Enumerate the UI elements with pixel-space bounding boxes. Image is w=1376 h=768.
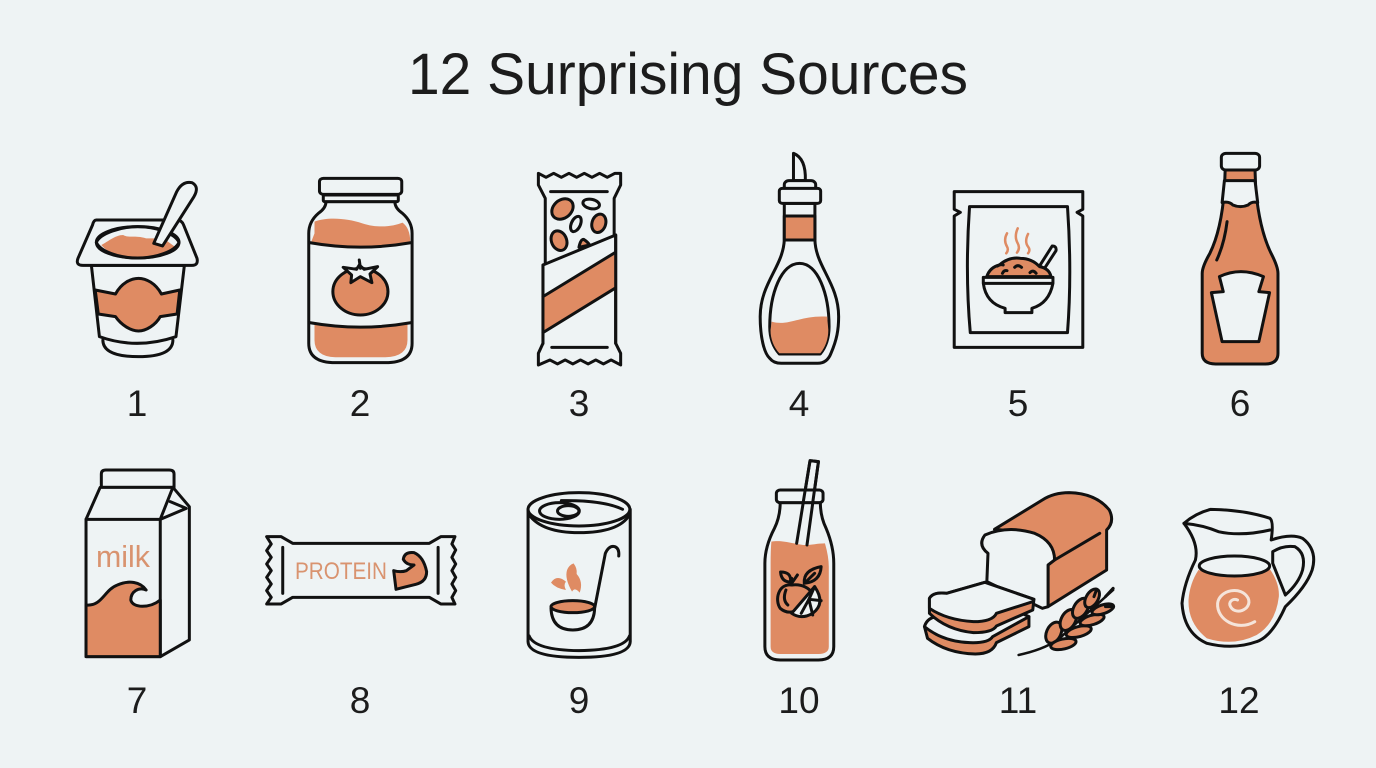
milk label: milk [96,539,150,574]
icon: milk carton [86,470,189,657]
title: 12 Surprising Sources [408,42,968,107]
number 1: 1 [127,383,147,424]
number 4: 4 [789,383,809,424]
number 8: 8 [350,680,370,721]
number 11: 11 [999,680,1037,721]
icon: tomato sauce jar [309,178,412,363]
icon: yogurt cup [77,182,197,357]
protein text: PROTEIN [295,558,387,585]
number 6: 6 [1230,383,1250,424]
icon: protein bar [267,537,456,604]
icon: syrup jug [1182,509,1314,646]
number 2: 2 [350,383,370,424]
number 5: 5 [1008,383,1028,424]
icon: granola bar [538,173,621,365]
number 3: 3 [569,383,589,424]
icon: sliced bread and wheat [924,493,1115,655]
icon: juice bottle with straw [765,461,834,660]
icon: ketchup bottle [1202,153,1278,364]
icon: soup can with ladle [528,493,630,657]
icon: soup packet [954,192,1083,347]
number 7: 7 [127,680,147,721]
number 9: 9 [569,680,589,721]
icon: salad dressing bottle [760,153,839,363]
number 10: 10 [778,680,820,721]
number 12: 12 [1218,680,1260,721]
